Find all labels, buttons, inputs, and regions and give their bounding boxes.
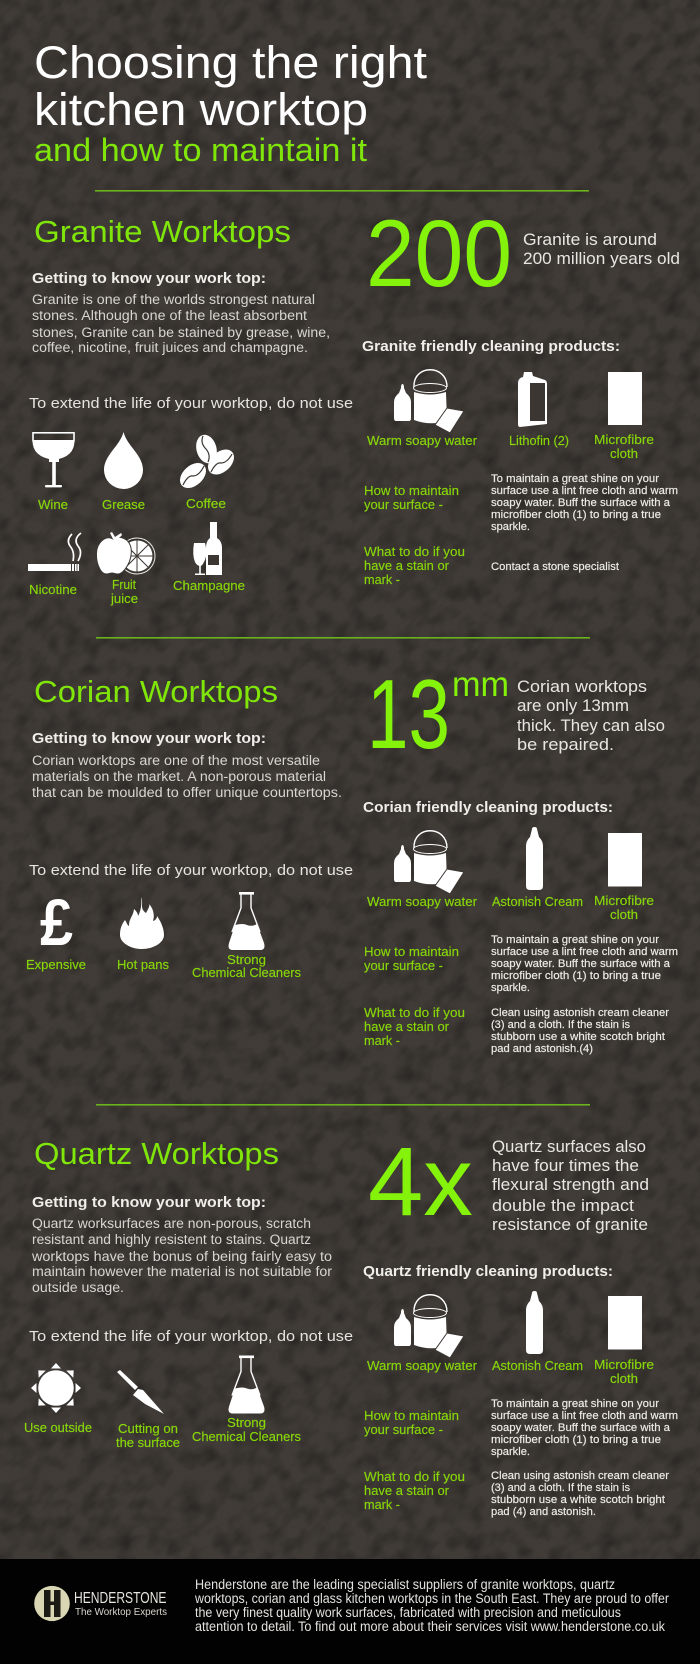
label: stain or mark: What to do if you xyxy=(364,544,465,559)
icon: lithofin xyxy=(518,372,547,427)
text block: how to maintain: To maintain a great shine on your xyxy=(491,1398,659,1410)
text block: granite intro: coffee, nicotine, fruit juices and champagne. xyxy=(32,340,308,355)
icon: microfibre cloth xyxy=(608,372,642,425)
label: how to maintain xyxy=(364,1408,459,1437)
panel: quartz worktops xyxy=(24,1127,678,1518)
text block: stain advice xyxy=(491,1007,669,1055)
text block: how to maintain: To maintain a great shine on your xyxy=(491,473,659,485)
text block: granite stat: 200 million years old xyxy=(523,250,680,268)
label: coffee: Coffee xyxy=(186,497,226,511)
label: microfibre cloth xyxy=(594,1358,654,1386)
text block: how to maintain: To maintain a great shine on your xyxy=(491,934,659,946)
label: microfibre cloth: Microfibre xyxy=(594,894,654,908)
title: and how to maintain it xyxy=(34,132,367,168)
text block: how to maintain: microfiber cloth (1) to bring a true xyxy=(491,970,661,982)
label: how to maintain: How to maintain xyxy=(364,483,459,498)
label: how to maintain xyxy=(364,483,459,512)
label: warm soapy water: Warm soapy water xyxy=(367,1359,477,1373)
icon: wine xyxy=(32,433,75,487)
footer xyxy=(0,1559,700,1664)
text block: corian intro xyxy=(32,730,342,800)
text block: how to maintain: microfiber cloth (1) to bring a true xyxy=(491,509,661,521)
label: fruit juice: juice xyxy=(110,592,138,606)
text block: how to maintain: sparkle. xyxy=(491,521,530,533)
label: strong chemical cleaners: Strong xyxy=(227,953,266,967)
label: warm soapy water: Warm soapy water xyxy=(367,434,477,448)
heading: do not use: To extend the life of your worktop, do not use xyxy=(29,862,353,879)
stat: 200: 200 xyxy=(366,201,512,307)
text block: stain advice: Contact a stone specialist xyxy=(491,561,619,573)
text block: how to maintain: soapy water. Buff the surface with a xyxy=(491,1422,671,1434)
icon: nicotine xyxy=(28,533,81,571)
heading: granite: Granite Worktops xyxy=(34,214,291,249)
label: how to maintain: your surface - xyxy=(364,958,443,973)
text block: quartz stat: resistance of granite xyxy=(492,1216,648,1234)
icon: coffee xyxy=(175,432,239,493)
icon: sun xyxy=(31,1363,81,1413)
label: strong chemical cleaners: Strong xyxy=(227,1416,266,1430)
label: microfibre cloth xyxy=(594,433,654,461)
text block: about henderstone: worktops, corian and glass kitchen worktops in the South East. They are proud to offer xyxy=(194,1591,669,1606)
panel: granite worktops xyxy=(28,201,680,606)
icon: microfibre cloth xyxy=(608,1296,642,1350)
label: nicotine: Nicotine xyxy=(29,583,77,597)
text block: stain advice: pad (4) and astonish. xyxy=(491,1506,596,1518)
title xyxy=(34,37,428,168)
label: microfibre cloth: Microfibre xyxy=(594,433,654,447)
text block: stain advice: (3) and a cloth. If the stain is xyxy=(491,1482,630,1494)
label: stain or mark: have a stain or xyxy=(364,1483,450,1498)
label: microfibre cloth: cloth xyxy=(610,447,638,461)
label: how to maintain xyxy=(364,944,459,973)
heading: do not use: To extend the life of your worktop, do not use xyxy=(29,1328,353,1345)
label: use outside: Use outside xyxy=(24,1421,92,1435)
text block: quartz intro: resistant and highly resistent to stains. Quartz xyxy=(32,1232,311,1247)
label: stain or mark: have a stain or xyxy=(364,558,450,573)
text block: stain advice: (3) and a cloth. If the stain is xyxy=(491,1019,630,1031)
icon: pound sign: £ xyxy=(40,885,73,959)
text block: quartz intro: outside usage. xyxy=(32,1280,124,1295)
icon: grease xyxy=(104,432,143,489)
icon: flask xyxy=(228,1356,264,1414)
text block: about henderstone xyxy=(194,1577,669,1634)
label: stain or mark xyxy=(364,1469,465,1512)
title: Choosing the right xyxy=(34,37,428,88)
label: astonish cream: Astonish Cream xyxy=(492,895,583,909)
label: strong chemical cleaners: Chemical Cleaners xyxy=(192,966,301,980)
label: champagne: Champagne xyxy=(173,579,245,593)
text block: corian stat xyxy=(517,678,665,754)
text block: quartz stat xyxy=(492,1138,649,1234)
text block: granite intro: Getting to know your work top: xyxy=(32,270,266,287)
label: microfibre cloth xyxy=(594,894,654,922)
label: strong chemical cleaners: Chemical Cleaners xyxy=(192,1430,301,1444)
text block: corian intro: materials on the market. A non-porous material xyxy=(32,769,326,784)
text block: stain advice xyxy=(491,1470,669,1518)
text block: corian intro: Corian worktops are one of the most versatile xyxy=(32,753,320,768)
text block: corian stat: thick. They can also xyxy=(517,717,665,735)
text block: granite intro: stones. Although one of the least absorbent xyxy=(32,308,307,323)
label: microfibre cloth: Microfibre xyxy=(594,1358,654,1372)
label: expensive: Expensive xyxy=(26,958,86,972)
label: cutting on the surface: the surface xyxy=(116,1436,180,1450)
label: how to maintain: How to maintain xyxy=(364,1408,459,1423)
text block: how to maintain: surface use a lint free cloth and warm xyxy=(491,946,678,958)
label: astonish cream: Astonish Cream xyxy=(492,1359,583,1373)
text block: how to maintain: surface use a lint free cloth and warm xyxy=(491,485,678,497)
icon: warm soapy water xyxy=(394,370,464,433)
label: hot pans: Hot pans xyxy=(117,958,169,972)
label: stain or mark: mark - xyxy=(364,1497,400,1512)
text block: corian stat: are only 13mm xyxy=(517,697,629,715)
text block: quartz intro: Quartz worksurfaces are non-porous, scratch xyxy=(32,1216,311,1231)
label: stain or mark: What to do if you xyxy=(364,1469,465,1484)
panel: corian worktops xyxy=(26,659,678,1055)
icon: warm soapy water xyxy=(394,831,464,894)
text block: quartz stat: flexural strength and xyxy=(492,1176,649,1194)
text block: corian intro: that can be moulded to offer unique countertops. xyxy=(32,785,342,800)
heading: granite cleaning products: Granite friendly cleaning products: xyxy=(362,338,620,355)
text block: quartz stat: have four times the xyxy=(492,1157,639,1175)
text block: how to maintain: sparkle. xyxy=(491,1446,530,1458)
text block: stain advice: pad and astonish.(4) xyxy=(491,1043,593,1055)
text block: about henderstone: Henderstone are the leading specialist suppliers of granite worktops, quartz xyxy=(195,1577,615,1592)
text block: how to maintain: sparkle. xyxy=(491,982,530,994)
label: stain or mark: mark - xyxy=(364,572,400,587)
title: kitchen worktop xyxy=(34,84,368,135)
icon: knife xyxy=(117,1370,164,1414)
text block: quartz stat: Quartz surfaces also xyxy=(492,1138,646,1156)
text block: stain advice: stubborn use a white scotch bright xyxy=(491,1031,665,1043)
icon: flame xyxy=(120,897,164,949)
logo: henderstone: The Worktop Experts xyxy=(75,1606,167,1618)
icon: champagne xyxy=(193,522,222,575)
label: how to maintain: your surface - xyxy=(364,497,443,512)
label: stain or mark: have a stain or xyxy=(364,1019,450,1034)
label: how to maintain: How to maintain xyxy=(364,944,459,959)
text block: stain advice: Clean using astonish cream cleaner xyxy=(491,1007,669,1019)
text block: quartz stat: double the impact xyxy=(492,1197,634,1215)
text block: how to maintain xyxy=(491,473,678,533)
label: fruit juice: Fruit xyxy=(112,578,137,592)
label: wine: Wine xyxy=(38,498,68,512)
label: strong chemical cleaners xyxy=(192,1416,301,1444)
text block: corian stat: be repaired. xyxy=(517,736,614,754)
icon: astonish cream xyxy=(526,827,543,890)
text block: how to maintain: microfiber cloth (1) to bring a true xyxy=(491,1434,661,1446)
text block: corian intro: Getting to know your work top: xyxy=(32,730,266,747)
heading: quartz cleaning products: Quartz friendly cleaning products: xyxy=(363,1263,613,1280)
text block: how to maintain xyxy=(491,1398,678,1458)
stat: 13mm: 13 xyxy=(367,659,450,769)
label: stain or mark: mark - xyxy=(364,1033,400,1048)
text block: quartz intro xyxy=(31,1194,333,1295)
heading: corian cleaning products: Corian friendly cleaning products: xyxy=(363,799,613,816)
label: stain or mark xyxy=(364,544,465,587)
text block: how to maintain: soapy water. Buff the surface with a xyxy=(491,958,671,970)
text block: granite intro: Granite is one of the worlds strongest natural xyxy=(32,292,315,307)
label: stain or mark xyxy=(364,1005,465,1048)
icon: astonish cream xyxy=(526,1291,543,1354)
icon: warm soapy water xyxy=(394,1295,464,1358)
text block: corian stat: Corian worktops xyxy=(517,678,647,696)
icon: flask xyxy=(228,892,264,950)
heading: corian: Corian Worktops xyxy=(34,674,278,709)
logo: henderstone xyxy=(34,1586,167,1621)
heading: do not use: To extend the life of your worktop, do not use xyxy=(29,395,353,412)
text block: granite intro: stones, Granite can be stained by grease, wine, xyxy=(32,325,330,340)
text block: quartz intro: worktops have the bonus of being fairly easy to xyxy=(31,1249,332,1264)
label: grease: Grease xyxy=(102,498,145,512)
text block: how to maintain xyxy=(491,934,678,994)
stat: 13mm: mm xyxy=(452,665,509,704)
text block: granite intro xyxy=(32,270,330,355)
label: strong chemical cleaners xyxy=(192,953,301,980)
label: microfibre cloth: cloth xyxy=(610,1372,638,1386)
text block: stain advice: stubborn use a white scotch bright xyxy=(491,1494,665,1506)
heading: quartz: Quartz Worktops xyxy=(34,1136,279,1171)
label: cutting on the surface: Cutting on xyxy=(118,1422,178,1436)
label: warm soapy water: Warm soapy water xyxy=(367,895,477,909)
text block: quartz intro: maintain however the material is not suitable for xyxy=(32,1264,333,1279)
text block: how to maintain: surface use a lint free cloth and warm xyxy=(491,1410,678,1422)
stat: 4x: 4x xyxy=(368,1127,473,1236)
text block: about henderstone: the very finest quality work surfaces, fabricated with precision and meticulous xyxy=(195,1605,621,1620)
text block: how to maintain: soapy water. Buff the surface with a xyxy=(491,497,671,509)
label: how to maintain: your surface - xyxy=(364,1422,443,1437)
text block: quartz intro: Getting to know your work top: xyxy=(32,1194,266,1211)
text block: granite stat xyxy=(523,231,680,268)
text block: about henderstone: attention to detail. To find out more about their services visit www.henderstone.co.uk xyxy=(195,1619,665,1634)
label: lithofin: Lithofin (2) xyxy=(509,434,569,448)
icon: fruit juice xyxy=(96,532,155,574)
label: microfibre cloth: cloth xyxy=(610,908,638,922)
icon: microfibre cloth xyxy=(608,833,642,886)
logo: henderstone: HENDERSTONE xyxy=(74,1590,166,1607)
text block: granite stat: Granite is around xyxy=(523,231,657,249)
label: stain or mark: What to do if you xyxy=(364,1005,465,1020)
text block: stain advice: Clean using astonish cream cleaner xyxy=(491,1470,669,1482)
label: cutting on the surface xyxy=(116,1422,180,1450)
label: fruit juice xyxy=(110,578,138,606)
